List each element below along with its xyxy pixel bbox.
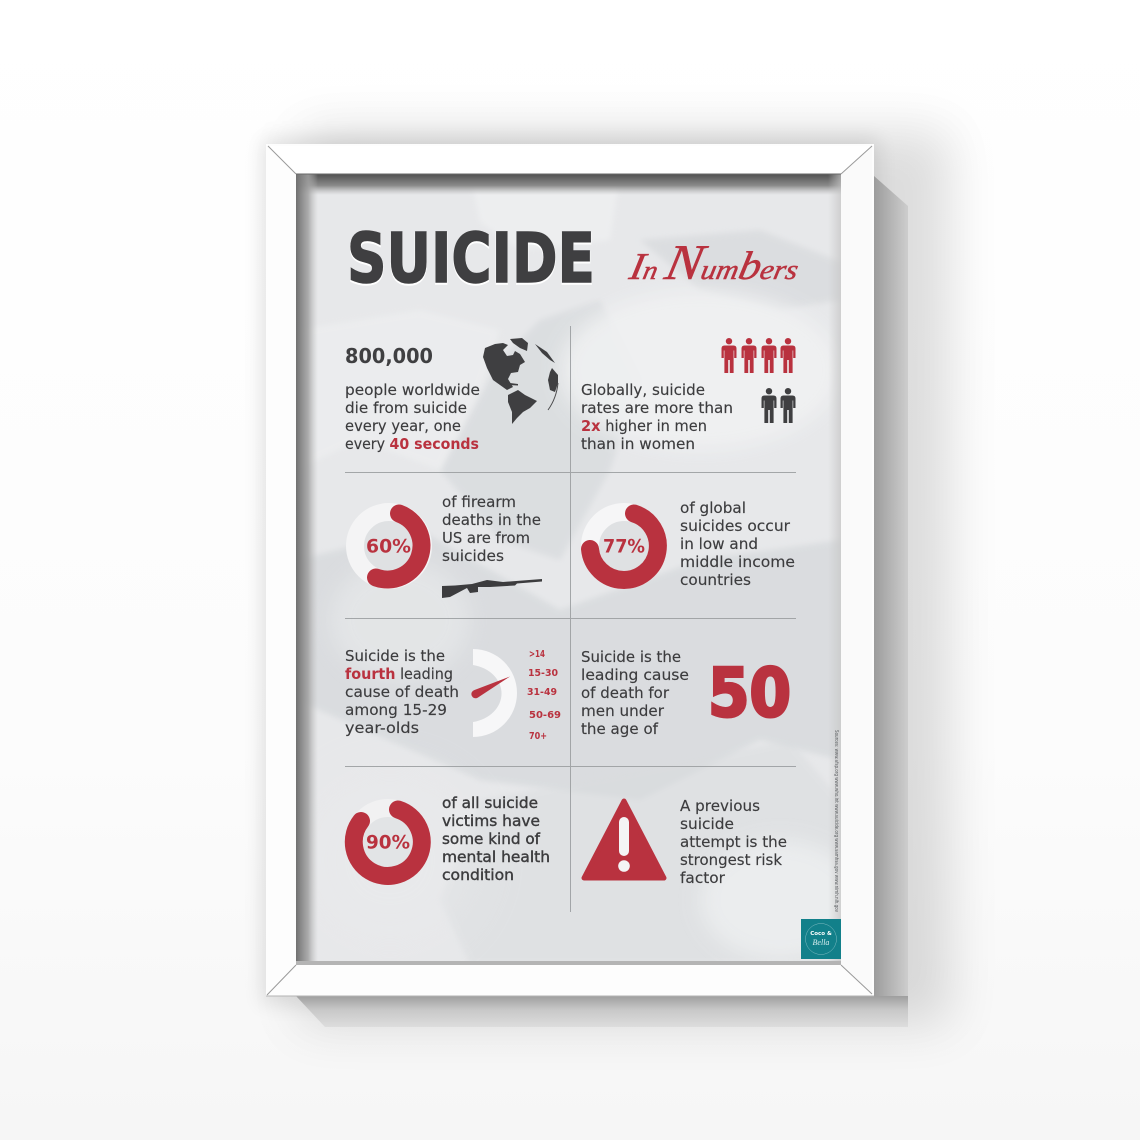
text block: people worldwide [345, 381, 480, 399]
text block: some kind of [442, 830, 541, 848]
title [347, 219, 805, 300]
text block: cause of death [345, 683, 459, 701]
text block: deaths in the [442, 511, 541, 529]
text block: every 40 seconds [345, 435, 479, 453]
panel: fourth leading cause [345, 647, 561, 742]
text block: middle income [680, 553, 795, 571]
panel: previous attempt [584, 797, 787, 887]
text block: die from suicide [345, 399, 467, 417]
panel: firearm deaths [355, 493, 542, 598]
age labels: 70+ [529, 731, 547, 742]
icon: four red men [722, 338, 796, 373]
watercolor wash [313, 232, 836, 958]
age labels: >14 [529, 649, 545, 660]
logo: Coco &amp; Bella: Bella [813, 938, 829, 947]
text block: Suicide is the [345, 647, 445, 665]
text block: Suicide is the [581, 648, 681, 666]
panel: men under 50 [581, 648, 791, 738]
stat: 50: 50 [708, 654, 791, 732]
text block: suicides [442, 547, 504, 565]
text block: of death for [581, 684, 670, 702]
stat: 800,000: 800,000 [345, 344, 433, 368]
text block [442, 794, 550, 884]
icon: two dark women [762, 388, 796, 423]
text block [442, 493, 541, 565]
panel: 800,000 worldwide [345, 338, 558, 453]
icon: globe [483, 338, 558, 424]
text block: of all suicide [442, 794, 538, 812]
gauge [471, 649, 517, 737]
text block [345, 381, 480, 453]
text block: suicide [680, 815, 734, 833]
text block [345, 647, 459, 737]
gauge needle [471, 676, 510, 698]
frame [266, 144, 874, 996]
donut: 90%: 90% [366, 832, 410, 854]
text block: mental health [442, 848, 550, 866]
age labels: 31-49 [527, 687, 557, 698]
panel: mental health [354, 794, 550, 884]
age labels [527, 649, 561, 742]
title: SUICIDE: SUICIDE [347, 220, 595, 300]
panel: low and middle income [590, 499, 795, 589]
text block: strongest risk [680, 851, 782, 869]
text block: of global [680, 499, 746, 517]
text block: suicides occur [680, 517, 791, 535]
poster paper [296, 174, 860, 965]
subtitle: In Numbers: In Numbers [625, 234, 805, 290]
age labels: 15-30 [528, 668, 558, 679]
text block: every year, one [345, 417, 461, 435]
text block [581, 648, 689, 738]
text block: 2x higher in men [581, 417, 707, 435]
donut: 90% [354, 808, 422, 876]
donut: 60%: 60% [366, 536, 411, 558]
text block: victims have [442, 812, 540, 830]
icon: warning triangle [584, 801, 664, 878]
donut: 77% [590, 512, 658, 580]
text block: rates are more than [581, 399, 733, 417]
source note: Sources: www.afsp.org www.who.int www.suicide.org www.samhsa.gov www.nimh.nih.gov [833, 730, 839, 912]
text block: of firearm [442, 493, 516, 511]
logo: Coco &amp; Bella: Coco & [810, 931, 832, 937]
donut: 77%: 77% [603, 536, 645, 558]
text block: Globally, suicide [581, 381, 705, 399]
text block [680, 499, 795, 589]
text block: men under [581, 702, 665, 720]
text block: attempt is the [680, 833, 787, 851]
text block: among 15-29 [345, 701, 447, 719]
text block: leading cause [581, 666, 689, 684]
age labels: 50-69 [529, 710, 561, 721]
text block: year-olds [345, 719, 419, 737]
frame shadow [262, 130, 950, 1027]
text block [680, 797, 787, 887]
divider lines [345, 326, 796, 912]
text block: in low and [680, 535, 758, 553]
text block: A previous [680, 797, 760, 815]
panel: men vs women rates [581, 338, 796, 453]
text block: countries [680, 571, 751, 589]
text block: fourth leading [345, 665, 453, 683]
text block: factor [680, 869, 726, 887]
logo: Coco &amp; Bella [801, 919, 841, 959]
inner frame shadow [296, 174, 841, 965]
text block: US are from [442, 529, 530, 547]
text block: the age of [581, 720, 659, 738]
donut: 60% [355, 512, 423, 580]
text block [581, 381, 733, 453]
title: SUICIDE: SUICIDE [347, 219, 595, 299]
text block: than in women [581, 435, 695, 453]
text block: condition [442, 866, 514, 884]
icon: rifle [442, 579, 542, 598]
